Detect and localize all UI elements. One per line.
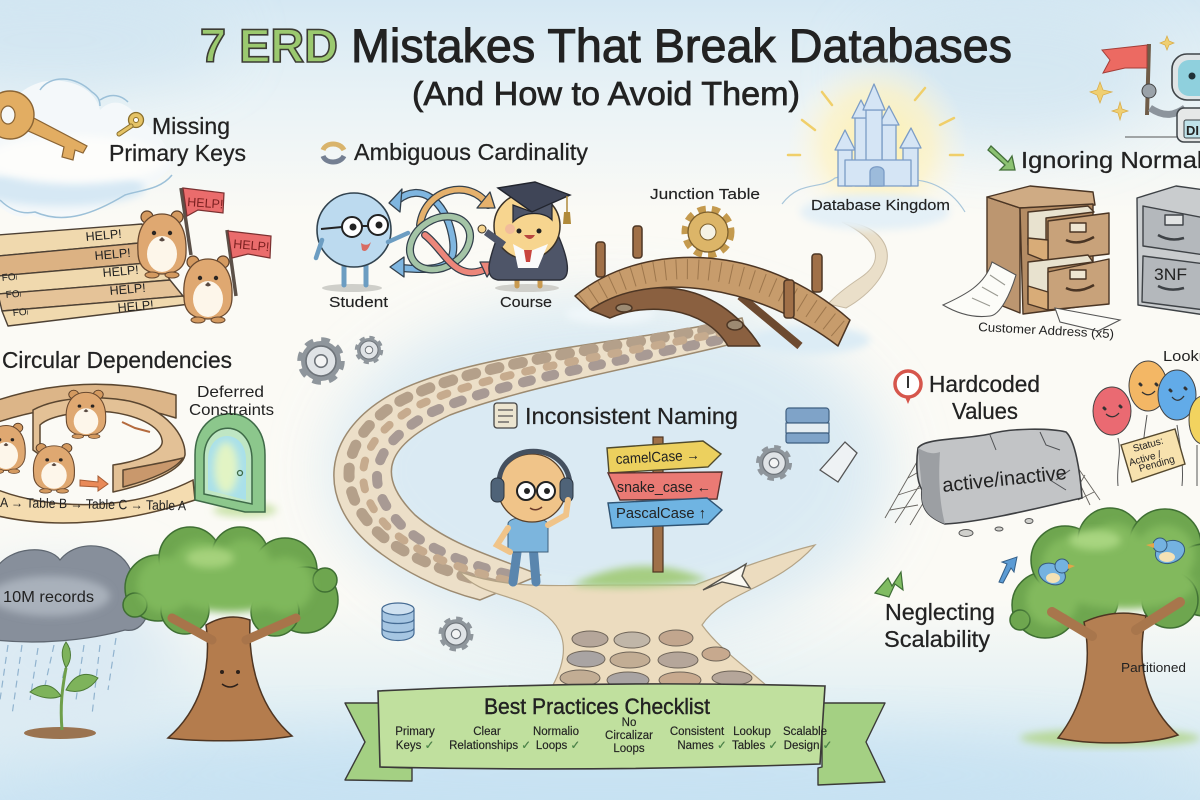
label: customer address: Customer Address (x5) bbox=[978, 320, 1114, 341]
cobwebs bbox=[885, 460, 1100, 525]
label: 3NF: 3NF bbox=[1154, 265, 1187, 284]
checklist items: Names ✓ bbox=[677, 740, 727, 752]
rain bbox=[0, 638, 116, 715]
sparkles bbox=[1090, 36, 1174, 120]
icon: notepad bbox=[494, 403, 517, 428]
title bbox=[200, 19, 1012, 112]
clouds bbox=[782, 176, 965, 230]
heading: Inconsistent Naming bbox=[525, 403, 738, 429]
storm cloud bbox=[0, 546, 149, 642]
hamsters with help flags: HELP! bbox=[187, 195, 224, 212]
cloud base bbox=[565, 304, 870, 354]
heading: Circular Dependencies bbox=[2, 347, 232, 373]
stacked planks: HELP! bbox=[109, 281, 146, 298]
sign: camelCase: camelCase → bbox=[615, 448, 700, 468]
wooden bridge bbox=[575, 226, 850, 346]
cobblestones near fork bbox=[560, 630, 752, 688]
chain banner bbox=[0, 480, 195, 523]
hamsters with help flags: HELP! bbox=[233, 237, 270, 254]
title: Mistakes That Break Databases bbox=[351, 19, 1012, 72]
circular wall maze bbox=[0, 384, 185, 492]
icon: green door bbox=[195, 414, 277, 517]
chain banner: A → Table B → Table C → Table A bbox=[0, 495, 186, 513]
signpost bbox=[607, 437, 722, 572]
sun glow bbox=[788, 55, 968, 235]
stacked planks bbox=[0, 224, 190, 326]
status sign: Status: bbox=[1132, 436, 1165, 455]
icon: sprout bbox=[24, 642, 98, 739]
label: course: Course bbox=[500, 294, 552, 311]
cloud bbox=[0, 79, 172, 219]
checklist items: Relationships ✓ bbox=[449, 740, 531, 752]
robot: DI bbox=[1186, 123, 1199, 138]
panel: inconsistent naming bbox=[491, 403, 738, 582]
panel: best practices checklist banner bbox=[345, 684, 885, 785]
scattered papers bbox=[943, 262, 1120, 331]
ribbon body bbox=[378, 684, 825, 769]
checklist items: Design ✓ bbox=[784, 740, 832, 752]
checklist items: Tables ✓ bbox=[732, 740, 778, 752]
heading bbox=[109, 113, 246, 166]
checklist items: Loops bbox=[613, 743, 645, 755]
bird right bbox=[1146, 537, 1188, 567]
checklist items: Clear bbox=[473, 726, 501, 738]
checklist items: Scalable bbox=[783, 726, 827, 738]
student character bbox=[316, 193, 408, 292]
stone block bbox=[917, 429, 1082, 524]
icon: golden gear bbox=[685, 209, 731, 255]
checklist items: Lookup bbox=[733, 726, 771, 738]
deferred constraints label: Constraints bbox=[189, 402, 274, 419]
heading: Scalability bbox=[884, 626, 991, 652]
checklist items: No bbox=[622, 717, 636, 729]
checklist items: Primary bbox=[395, 726, 435, 738]
sun rays bbox=[788, 88, 963, 155]
stacked planks: HELP! bbox=[85, 227, 122, 244]
panel: neglecting scalability bbox=[875, 508, 1200, 747]
heading: Neglecting bbox=[885, 599, 995, 625]
panel: ambiguous cardinality bbox=[316, 139, 588, 311]
panel: neglecting scalability left scene bbox=[0, 527, 338, 741]
label: junction table: Junction Table bbox=[650, 186, 760, 203]
wooden filing cabinet bbox=[987, 186, 1109, 314]
label: database kingdom: Database Kingdom bbox=[811, 197, 950, 214]
balloon: blue bbox=[1158, 370, 1196, 420]
title: (And How to Avoid Them) bbox=[412, 75, 800, 112]
sign: PascalCase: PascalCase ↑ bbox=[616, 506, 706, 522]
course character bbox=[478, 182, 571, 292]
hamsters running bbox=[0, 390, 150, 493]
panel: missing primary keys bbox=[0, 79, 271, 326]
tangled arrows bbox=[389, 189, 496, 280]
heading: Hardcoded bbox=[929, 371, 1040, 397]
checklist items: Keys ✓ bbox=[396, 740, 434, 752]
panel: hardcoded values bbox=[885, 371, 1100, 536]
deferred constraints label: Deferred bbox=[197, 384, 264, 401]
status sign: Active / bbox=[1128, 449, 1163, 469]
ribbon tails bbox=[345, 703, 885, 785]
bird left bbox=[1035, 559, 1075, 589]
stacked planks: HELP! bbox=[117, 298, 154, 315]
pebbles bbox=[959, 518, 1033, 536]
heading: Best Practices Checklist bbox=[484, 694, 710, 719]
panel: robot with flag bbox=[1090, 36, 1200, 142]
balloon: red bbox=[1093, 387, 1131, 435]
icon: blue arrow bbox=[999, 557, 1017, 583]
label: student: Student bbox=[329, 294, 389, 311]
icon: server bbox=[786, 408, 829, 443]
icon: small key bbox=[119, 112, 144, 134]
heading: Ignoring Normaliz bbox=[1021, 147, 1200, 173]
checklist items bbox=[395, 717, 832, 755]
panel: circular dependencies bbox=[0, 347, 277, 523]
stacked planks: FOₗ bbox=[1, 272, 18, 284]
icon: database cylinder bbox=[382, 603, 414, 640]
stacked planks: HELP! bbox=[102, 263, 139, 280]
icon: cycle arrows bbox=[323, 144, 344, 162]
decorative gears and icons bbox=[301, 338, 857, 649]
label: partitioned: Partitioned bbox=[1121, 660, 1186, 675]
big tree bbox=[1010, 508, 1200, 747]
deferred constraints label bbox=[189, 384, 274, 419]
balloon: yellow bbox=[1189, 396, 1200, 444]
storm cloud: 10M records bbox=[3, 589, 94, 606]
stacked planks: FOₗ bbox=[5, 289, 22, 301]
checklist items: Normalio bbox=[533, 726, 579, 738]
stacked planks: FOₗ bbox=[12, 307, 29, 319]
heading: Primary Keys bbox=[109, 140, 246, 166]
icon: castle bbox=[835, 84, 921, 186]
hamsters with help flags bbox=[138, 188, 271, 323]
icon: green arrow bbox=[875, 572, 903, 597]
balloon: orange bbox=[1129, 361, 1167, 411]
panel: winding cobblestone path bbox=[334, 222, 887, 687]
grey filing cabinet bbox=[1137, 186, 1200, 315]
title: 7 ERD bbox=[200, 19, 338, 72]
icon: red pin bbox=[895, 371, 921, 404]
checklist items: Circalizar bbox=[605, 730, 653, 742]
tree with smile bbox=[123, 527, 338, 741]
heading: Values bbox=[952, 398, 1018, 424]
stone block: active/inactive bbox=[941, 462, 1068, 497]
icon: green arrow bbox=[988, 146, 1015, 170]
heading: Missing bbox=[152, 113, 230, 139]
status sign: Pending bbox=[1138, 454, 1176, 475]
status sign bbox=[1121, 429, 1185, 482]
heading bbox=[929, 371, 1040, 424]
balloon strings bbox=[1118, 415, 1197, 486]
stacked planks: HELP! bbox=[94, 246, 131, 263]
checklist items: Consistent bbox=[670, 726, 725, 738]
heading: Ambiguous Cardinality bbox=[354, 139, 588, 165]
panel: ignoring normalization bbox=[943, 146, 1200, 341]
panel: lookup tables balloons bbox=[1093, 348, 1200, 486]
panel: database kingdom bbox=[782, 55, 968, 235]
sign: snake_case: snake_case ← bbox=[617, 480, 711, 496]
panel: junction table bridge bbox=[565, 186, 870, 354]
checklist items: Loops ✓ bbox=[536, 740, 580, 752]
heading bbox=[884, 599, 995, 652]
flag bbox=[1102, 44, 1149, 115]
icon: tag bbox=[820, 442, 857, 482]
character with headphones bbox=[491, 451, 573, 582]
icon: big golden key bbox=[0, 91, 87, 160]
